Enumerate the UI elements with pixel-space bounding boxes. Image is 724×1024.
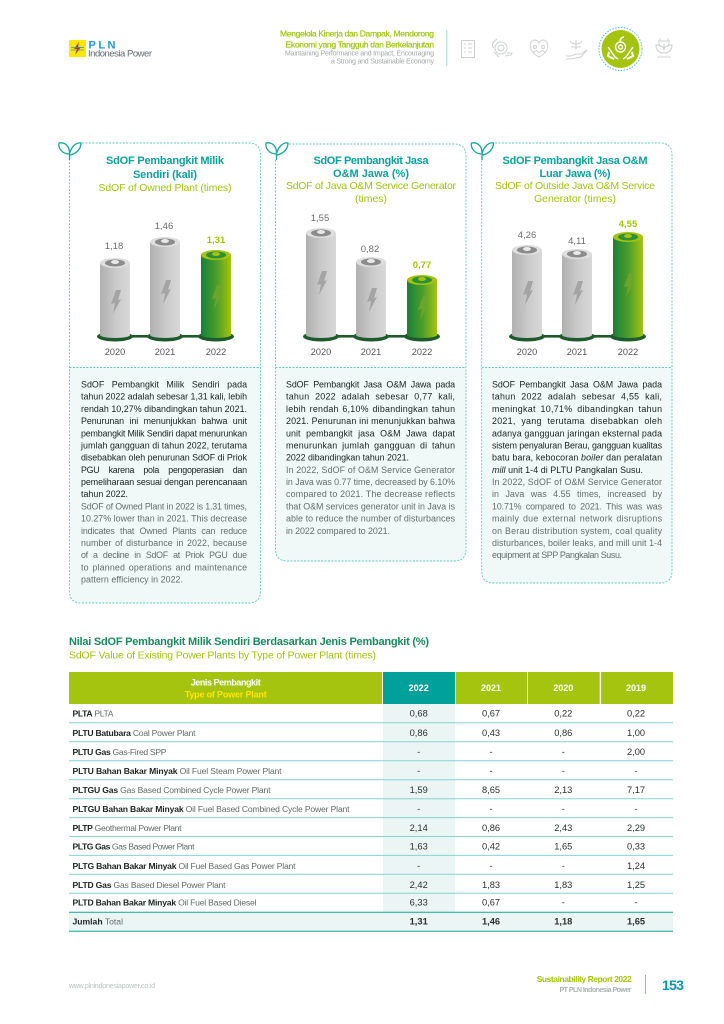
heading: SdOF Pembangkit Jasa O&M xyxy=(502,155,648,167)
panel: SdOF of Java O&M Service Generator xyxy=(266,143,466,561)
text block: description: tahun 2022 adalah sebesar 1,31 kali, lebih xyxy=(81,392,247,402)
bar 2022: 2022 xyxy=(412,347,432,357)
bar 2021: 1,46 xyxy=(155,221,173,232)
text block: description: on Berau distribution system, coal quality xyxy=(492,526,663,536)
text block: description: SdOF of Owned Plant in 2022 is 1.31 times, xyxy=(81,501,247,511)
row: PLTG Gas: PLTG Gas Gas Based Power Plant xyxy=(72,842,195,852)
row: PLTG Gas xyxy=(72,842,645,852)
row: PLTU Gas: 2,00 xyxy=(627,747,645,757)
footer: website: www.plnindonesiapower.co.id xyxy=(68,983,155,990)
table header row xyxy=(69,672,673,704)
icon: hands and heart xyxy=(530,40,548,57)
row: PLTG BBM: 1,24 xyxy=(627,861,645,871)
bar 2020: 4,26 xyxy=(518,230,536,241)
row: PLTU BBM: - xyxy=(489,766,493,776)
icon: hand holding plant xyxy=(566,40,587,59)
row: PLTG BBM: PLTG Bahan Bakar Minyak Oil Fuel Based Gas Power Plant xyxy=(72,861,296,871)
row: PLTG Gas: 1,63 xyxy=(410,842,428,852)
chapter heading xyxy=(280,29,434,66)
text block: description: to planned operations and maintenance xyxy=(81,562,247,572)
text block: description: in 2022 compared to 2021. xyxy=(286,526,390,536)
bar 2022: 1,31 xyxy=(207,235,226,246)
table heading xyxy=(69,636,429,662)
footer: report name: PT PLN Indonesia Power xyxy=(560,987,632,994)
heading: O&M Jawa (%) xyxy=(333,168,409,180)
row: PLTD BBM xyxy=(72,898,638,908)
row: PLTD Gas xyxy=(72,880,645,890)
row: total: 1,65 xyxy=(627,917,645,927)
table header row: 2020 xyxy=(553,683,573,693)
row: PLTGU Gas: PLTGU Gas Gas Based Combined Cycle Power Plant xyxy=(72,785,271,795)
text block: description: 2021. Penurunan ini menunjukkan bahwa xyxy=(286,416,455,426)
text block: description: SdOF Pembangkit Jasa O&M Jawa pada xyxy=(492,380,662,390)
text block: description: SdOF Pembangkit Jasa O&M Jawa pada xyxy=(286,380,455,390)
row: PLTU BBM xyxy=(72,766,638,776)
row: PLTA: 0,67 xyxy=(482,708,500,718)
heading: (times) xyxy=(355,193,387,205)
table heading: Nilai SdOF Pembangkit Milik Sendiri Berdasarkan Jenis Pembangkit (%) xyxy=(69,636,429,648)
row: PLTU Gas: PLTU Gas Gas-Fired SPP xyxy=(72,747,167,757)
bar 2020 xyxy=(100,241,130,357)
text block: description: 2021, yang terutama disebabkan oleh xyxy=(492,416,662,426)
table heading: SdOF Value of Existing Power Plants by Type of Power Plant (times) xyxy=(69,650,376,662)
text block: description: 10.27% lower than in 2021. This decrease xyxy=(81,514,247,524)
row: PLTGU Gas: 7,17 xyxy=(627,785,645,795)
table header row: Type of Power Plant xyxy=(185,690,267,700)
text block: description: In 2022, SdOF of O&M Service Generator xyxy=(286,465,455,475)
row: PLTU Batubara: 1,00 xyxy=(627,728,645,738)
row: PLTP: 2,43 xyxy=(554,823,572,833)
bar 2022 xyxy=(613,219,643,357)
bar 2021 xyxy=(150,221,180,357)
row: PLTP: 2,29 xyxy=(627,823,645,833)
table: SdOF by type of power plant xyxy=(69,672,673,931)
text block: description: pattern efficiency in 2022. xyxy=(81,574,183,584)
chart: battery bars xyxy=(97,221,234,357)
bar 2020: 2020 xyxy=(517,347,537,357)
row: PLTD Gas: PLTD Gas Gas Based Diesel Power Plant xyxy=(72,880,226,890)
bar 2020: 2020 xyxy=(311,347,331,357)
row: PLTG Gas: 0,33 xyxy=(627,842,645,852)
row: PLTU Batubara: 0,43 xyxy=(482,728,500,738)
bar 2020: 2020 xyxy=(105,347,125,357)
row: PLTU Batubara: PLTU Batubara Coal Power Plant xyxy=(72,728,196,738)
bar 2022 xyxy=(407,260,437,357)
bar 2021: 2021 xyxy=(567,347,587,357)
bar 2022: 0,77 xyxy=(413,260,431,271)
text block: description: rendah 10,27% dibandingkan tahun 2021. xyxy=(81,404,247,414)
text block: description: disebabkan oleh penurunan SdOF di Priok xyxy=(81,453,248,463)
row: PLTG BBM: - xyxy=(417,861,420,871)
text block: description: SdOF Pembangkit Milik Sendiri pada xyxy=(81,380,247,390)
text block: description: menurunkan jumlah gangguan di tahun xyxy=(286,440,455,450)
text block: description: sistem penyaluran Berau, gangguan kualitas xyxy=(492,440,663,450)
logo: PLN Indonesia Power xyxy=(69,40,152,60)
row: PLTU Batubara: 0,86 xyxy=(410,728,428,738)
row: PLTP xyxy=(72,823,645,833)
row: total: 1,18 xyxy=(554,917,572,927)
row: PLTD Gas: 2,42 xyxy=(410,880,428,890)
table header row: 2022 xyxy=(409,683,429,693)
row: PLTGU Gas: 1,59 xyxy=(410,785,428,795)
row: PLTD Gas: 1,25 xyxy=(627,880,645,890)
row: PLTA: 0,22 xyxy=(627,708,645,718)
icon: leaf xyxy=(266,143,288,160)
row: PLTA: 0,22 xyxy=(554,708,572,718)
heading xyxy=(98,155,232,194)
text block: description: 10.71% compared to 2021. This was was xyxy=(492,501,663,511)
row: PLTG BBM: - xyxy=(489,861,493,871)
heading xyxy=(495,155,655,205)
row: total: 1,31 xyxy=(410,917,428,927)
row: PLTGU BBM xyxy=(72,804,638,814)
row: PLTD BBM: - xyxy=(634,898,638,908)
row: PLTU Gas: - xyxy=(489,747,493,757)
heading: SdOF Pembangkit Jasa xyxy=(314,155,429,167)
text block: description: pembangkit Milik Sendiri dapat menurunkan xyxy=(81,428,247,438)
text block: description: In 2022, SdOF of O&M Service Generator xyxy=(492,477,662,487)
text block: description: meningkat 10,71% dibandingkan tahun xyxy=(492,404,662,414)
text block: description: unit pembangkit jasa O&M Jawa dapat xyxy=(286,428,456,438)
row: PLTA xyxy=(72,708,645,718)
row: PLTGU Gas: 8,65 xyxy=(482,785,500,795)
text block: description: in Java was 4.55 times, increased by xyxy=(492,489,663,499)
text block: description: in Java was 0.77 time, decreased by 6.10% xyxy=(286,477,455,487)
table header row: 2019 xyxy=(626,683,646,693)
text block: description: mainly due external network disruptions xyxy=(492,514,663,524)
row: PLTGU Gas xyxy=(72,785,645,795)
panel: SdOF of Outside Java O&M Service Generator xyxy=(471,143,672,583)
text block: description: compared to 2021. The decrease reflects xyxy=(286,489,456,499)
text block: description: tahun 2022. xyxy=(81,489,128,499)
row: PLTGU BBM: - xyxy=(489,804,493,814)
row: PLTGU Gas: 2,13 xyxy=(554,785,572,795)
table header row: Jenis Pembangkit xyxy=(191,678,261,688)
text block: description xyxy=(80,380,248,584)
text block: description: batu bara, kebocoran boiler dan peralatan xyxy=(492,453,662,463)
row: PLTA: PLTA PLTA xyxy=(72,708,114,718)
bar 2021: 2021 xyxy=(155,347,175,357)
chapter heading: Maintaining Performance and Impact, Encouraging xyxy=(285,50,434,58)
text block: description: disturbances, boiler leaks, and mill unit 1-4 xyxy=(492,538,662,548)
footer: report name xyxy=(537,974,632,994)
row: PLTGU BBM: - xyxy=(417,804,420,814)
row: PLTD BBM: 6,33 xyxy=(410,898,428,908)
bar 2021 xyxy=(562,236,592,357)
icon: active economy badge xyxy=(599,28,642,70)
text block: description: 2022 dibandingkan tahun 2021. xyxy=(286,453,409,463)
row: PLTD Gas: 1,83 xyxy=(482,880,500,890)
row: PLTU BBM: - xyxy=(417,766,420,776)
bar 2020: 1,18 xyxy=(105,241,123,252)
text block: description: that O&M services generator unit in Java is xyxy=(286,501,456,511)
chapter heading: a Strong and Sustainable Economy xyxy=(331,58,434,66)
text block: description: PGU karena pola pengoperasian dan xyxy=(81,465,247,475)
row: PLTU Batubara xyxy=(72,728,645,738)
heading: Generator (times) xyxy=(534,193,616,205)
text block: description: mill unit 1-4 di PLTU Pangkalan Susu. xyxy=(492,465,643,475)
row: PLTD BBM: - xyxy=(562,898,565,908)
table header row: 2021 xyxy=(481,683,501,693)
heading xyxy=(286,155,456,205)
text block: description: jumlah gangguan di tahun 2022, terutama xyxy=(80,440,247,450)
row: PLTP: 2,14 xyxy=(410,823,428,833)
text block: description: tahun 2022 adalah sebesar 0,77 kali, xyxy=(286,392,455,402)
icon: plant with plug xyxy=(656,38,672,57)
text block: description xyxy=(286,380,456,536)
text block: description: number of disturbance in 2022, because xyxy=(81,538,247,548)
row: total xyxy=(72,917,645,927)
bar 2022: 2022 xyxy=(618,347,638,357)
bar 2020 xyxy=(306,213,336,357)
bar 2021: 4,11 xyxy=(568,236,586,247)
row: PLTU Gas: - xyxy=(417,747,420,757)
bar 2021: 0,82 xyxy=(361,244,379,255)
text block: description: Penurunan ini menunjukkan bahwa unit xyxy=(81,416,248,426)
icon: gear with hands xyxy=(492,39,512,57)
row: PLTA: 0,68 xyxy=(410,708,428,718)
text block: description xyxy=(492,380,663,560)
text block: description: of a decline in SdOF at Priok PGU due xyxy=(81,550,247,560)
bar 2020 xyxy=(512,230,542,357)
row: PLTU Gas: - xyxy=(562,747,565,757)
heading: SdOF of Java O&M Service Generator xyxy=(286,180,456,192)
heading: Luar Jawa (%) xyxy=(540,168,611,180)
logo: PLN Indonesia Power: Indonesia Power xyxy=(88,48,152,60)
panel: SdOF of Owned Plant xyxy=(59,143,260,603)
chapter heading: Mengelola Kinerja dan Dampak, Mendorong xyxy=(280,29,434,39)
row: PLTGU BBM: - xyxy=(634,804,638,814)
row: PLTU Batubara: 0,86 xyxy=(554,728,572,738)
text block: description: tahun 2022 adalah sebesar 4,55 kali, xyxy=(492,392,662,402)
row: PLTP: 0,86 xyxy=(482,823,500,833)
text block: description: able to reduce the number of disturbances xyxy=(286,514,456,524)
row: PLTU BBM: - xyxy=(562,766,565,776)
bar 2022: 4,55 xyxy=(619,219,638,230)
row: PLTU Gas xyxy=(72,747,645,757)
row: PLTD BBM: PLTD Bahan Bakar Minyak Oil Fuel Based Diesel xyxy=(72,898,257,908)
row: PLTG Gas: 1,65 xyxy=(554,842,572,852)
row: PLTG BBM xyxy=(72,861,645,871)
bar 2022: 2022 xyxy=(206,347,226,357)
text block: description: indicates that Owned Plants can reduce xyxy=(81,526,247,536)
row: PLTD BBM: 0,67 xyxy=(482,898,500,908)
row: PLTU BBM: - xyxy=(634,766,638,776)
logo: PLN Indonesia Power: PLN xyxy=(88,40,116,52)
icon: leaf xyxy=(471,143,494,160)
row: total: Jumlah Total xyxy=(72,917,123,927)
chapter heading: Ekonomi yang Tangguh dan Berkelanjutan xyxy=(286,39,434,49)
bar 2022 xyxy=(201,235,231,357)
text block: description: pemeliharaan sesuai dengan perencanaan xyxy=(81,477,247,487)
bar 2021 xyxy=(356,244,386,357)
chart: battery bars xyxy=(509,219,646,357)
bar 2021: 2021 xyxy=(361,347,381,357)
icon: leaf xyxy=(59,143,81,160)
heading: SdOF Pembangkit Milik xyxy=(106,155,225,167)
row: PLTP: PLTP Geothermal Power Plant xyxy=(72,823,182,833)
footer: page number: 153 xyxy=(662,977,684,993)
row: PLTG Gas: 0,42 xyxy=(482,842,500,852)
row: PLTD Gas: 1,83 xyxy=(554,880,572,890)
icon: checklist document xyxy=(462,40,474,58)
heading: SdOF of Owned Plant (times) xyxy=(98,182,232,194)
bar 2020: 1,55 xyxy=(311,213,329,224)
footer: report name: Sustainability Report 2022 xyxy=(537,974,632,984)
text block: description: lebih rendah 6,10% dibandingkan tahun xyxy=(286,404,455,414)
row: PLTGU BBM: PLTGU Bahan Bakar Minyak Oil Fuel Based Combined Cycle Power Plant xyxy=(72,804,350,814)
row: PLTGU BBM: - xyxy=(562,804,565,814)
heading: Sendiri (kali) xyxy=(133,169,197,181)
chart: battery bars xyxy=(303,213,440,357)
row: PLTG BBM: - xyxy=(562,861,565,871)
heading: SdOF of Outside Java O&M Service xyxy=(495,180,655,192)
text block: description: adanya gangguan jaringan eksternal pada xyxy=(492,428,662,438)
row: PLTU BBM: PLTU Bahan Bakar Minyak Oil Fuel Steam Power Plant xyxy=(72,766,282,776)
row: total: 1,46 xyxy=(482,917,500,927)
text block: description: equipment at SPP Pangkalan Susu. xyxy=(492,550,622,560)
